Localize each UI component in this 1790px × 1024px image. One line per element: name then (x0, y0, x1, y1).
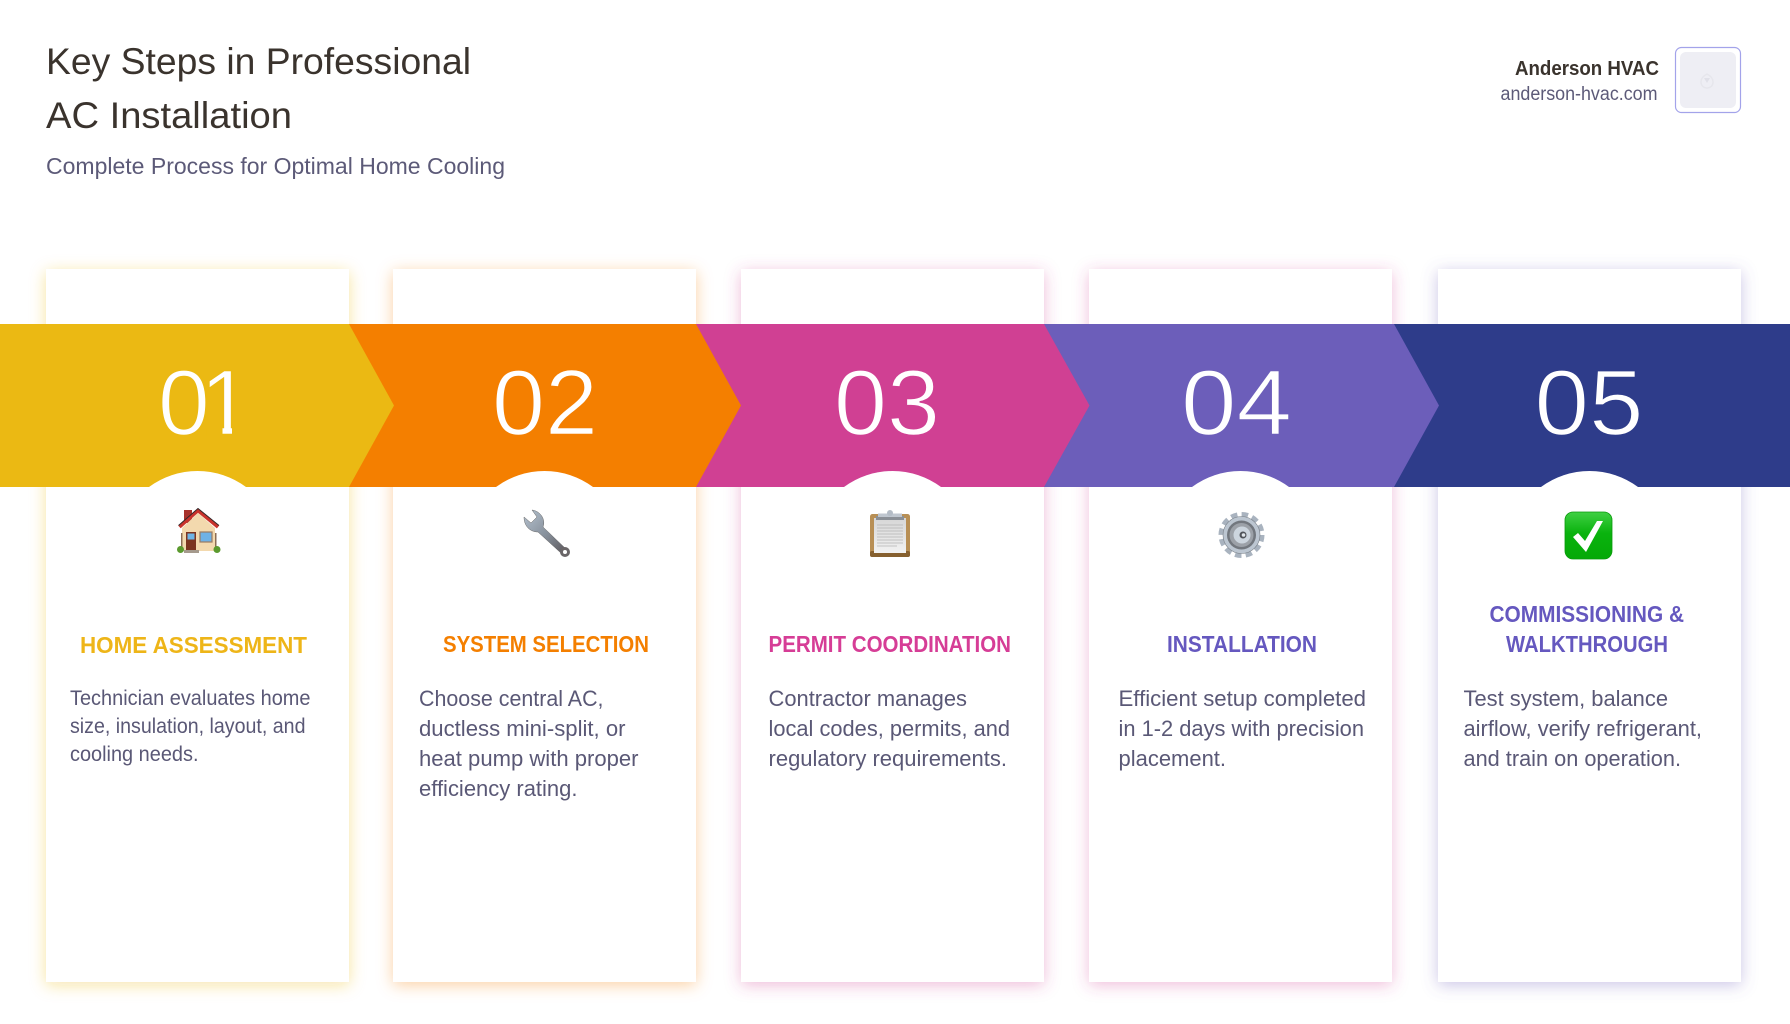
arrow band: step 02 (349, 324, 741, 487)
title: Key Steps in Professional (46, 41, 471, 82)
description (1118, 686, 1366, 771)
number 05: 05 (1534, 350, 1644, 454)
arrow band: step 04 (1044, 324, 1439, 487)
logo placeholder (1676, 48, 1740, 112)
description: ductless mini-split, or (419, 716, 626, 741)
description: placement. (1118, 746, 1226, 771)
icon: gear (1221, 514, 1262, 556)
panel: step 5 commissioning and walkthrough (1438, 269, 1741, 982)
description (768, 686, 1010, 771)
brand website: anderson-hvac.com (1500, 84, 1658, 105)
description: Test system, balance (1464, 686, 1668, 711)
heading: COMMISSIONING & (1490, 601, 1684, 627)
arrow band: step 05 (1394, 324, 1790, 487)
panel: step 3 permit coordination (741, 269, 1044, 982)
title: AC Installation (46, 95, 292, 136)
icon: clipboard (870, 510, 910, 557)
description: airflow, verify refrigerant, (1464, 716, 1702, 741)
heading: PERMIT COORDINATION (768, 631, 1011, 657)
description: Choose central AC, (419, 686, 604, 711)
brand name: Anderson HVAC (1515, 58, 1659, 80)
description (70, 686, 310, 766)
panel: step 1 home assessment (46, 269, 349, 982)
heading: SYSTEM SELECTION (443, 631, 649, 657)
description: local codes, permits, and (768, 716, 1010, 741)
description (1464, 686, 1702, 771)
description: in 1-2 days with precision (1118, 716, 1364, 741)
description: size, insulation, layout, and (70, 714, 306, 738)
number 04: 04 (1181, 350, 1292, 454)
description: regulatory requirements. (768, 746, 1007, 771)
heading: INSTALLATION (1167, 631, 1317, 657)
description: and train on operation. (1464, 746, 1681, 771)
number 01: 01 (158, 350, 252, 454)
panel: step 2 system selection (393, 269, 696, 982)
description: heat pump with proper (419, 746, 639, 771)
description: Efficient setup completed (1118, 686, 1366, 711)
heading: WALKTHROUGH (1506, 631, 1668, 657)
title (46, 41, 471, 136)
description: efficiency rating. (419, 776, 578, 801)
arrow band: step 03 (696, 324, 1090, 487)
description: cooling needs. (70, 742, 198, 766)
panel: step 4 installation (1089, 269, 1392, 982)
number 03: 03 (834, 350, 940, 454)
heading: HOME ASSESSMENT (80, 632, 307, 658)
icon: house (177, 508, 220, 553)
heading (1490, 601, 1684, 657)
number 02: 02 (492, 350, 598, 454)
subtitle: Complete Process for Optimal Home Cooling (46, 153, 505, 179)
brand block (1500, 48, 1740, 112)
description: Contractor manages (768, 686, 967, 711)
icon: check mark (1565, 512, 1612, 559)
description: Technician evaluates home (70, 686, 310, 710)
arrow band: step 01 (0, 324, 394, 487)
description (419, 686, 639, 801)
icon: wrench (524, 510, 570, 557)
